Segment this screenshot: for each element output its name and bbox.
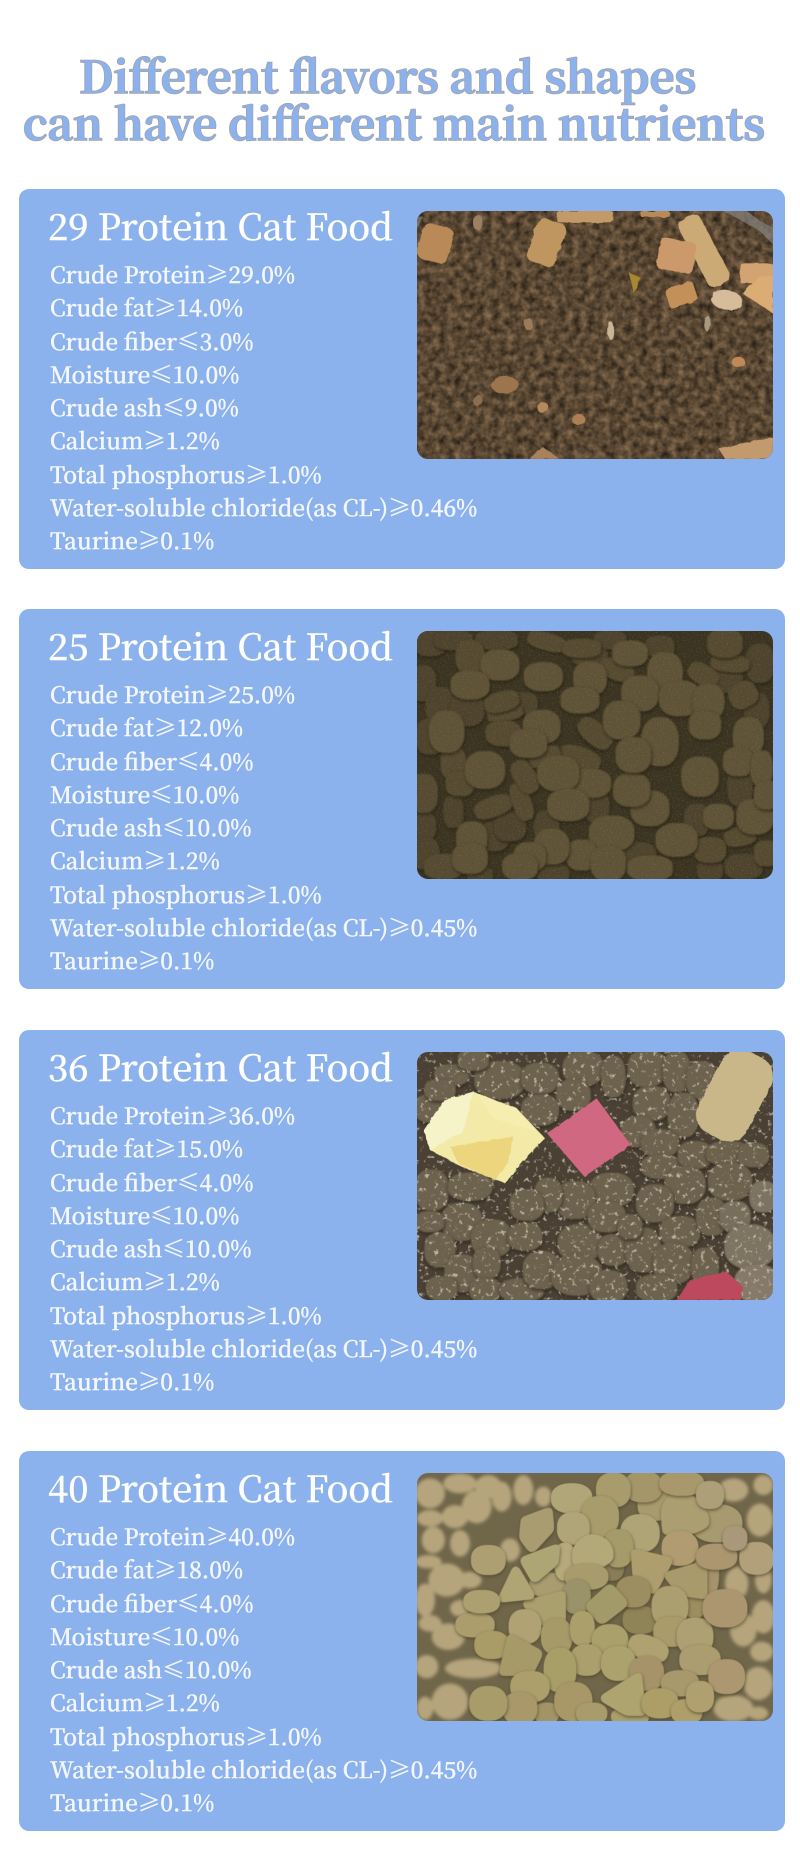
nutrient list: Crude Protein≥25.0% [50, 678, 295, 710]
nutrient list: Water-soluble chloride(as CL-)≥0.46% [50, 491, 477, 523]
panel heading: 40 Protein Cat Food [48, 1462, 393, 1513]
nutrient list: Moisture≤10.0% [50, 1620, 239, 1652]
nutrient list: Taurine≥0.1% [50, 524, 214, 556]
nutrient list: Crude fiber≤4.0% [50, 1166, 253, 1198]
nutrient list: Crude ash≤10.0% [50, 1653, 251, 1685]
nutrient list: Moisture≤10.0% [50, 1199, 239, 1231]
nutrient list [50, 678, 477, 976]
photo: triangular tan kibble [417, 1473, 773, 1721]
photo: mixed kibble with freeze-dried cubes [417, 1052, 773, 1300]
nutrient list: Crude fat≥15.0% [50, 1132, 243, 1164]
nutrient list: Moisture≤10.0% [50, 778, 239, 810]
photo: round flat brown kibble [417, 631, 773, 879]
nutrient list: Crude fat≥12.0% [50, 711, 243, 743]
nutrient list: Water-soluble chloride(as CL-)≥0.45% [50, 1332, 477, 1364]
nutrient list: Calcium≥1.2% [50, 1686, 220, 1718]
nutrient list: Crude fiber≤4.0% [50, 745, 253, 777]
title line 1: Different flavors and shapes [79, 44, 696, 106]
panel: 29 protein cat food [19, 189, 785, 569]
nutrient list: Crude fat≥18.0% [50, 1553, 243, 1585]
nutrient list: Taurine≥0.1% [50, 1365, 214, 1397]
nutrient list: Total phosphorus≥1.0% [50, 458, 322, 490]
nutrient list: Crude ash≤10.0% [50, 1232, 251, 1264]
nutrient list: Water-soluble chloride(as CL-)≥0.45% [50, 1753, 477, 1785]
panel heading: 36 Protein Cat Food [48, 1041, 393, 1092]
panel heading: 29 Protein Cat Food [48, 200, 393, 251]
nutrient list: Calcium≥1.2% [50, 1265, 220, 1297]
nutrient list: Crude fiber≤3.0% [50, 325, 253, 357]
nutrient list [50, 1520, 477, 1818]
photo: small dark kibble with treat chunks [417, 211, 773, 459]
nutrient list: Crude Protein≥29.0% [50, 258, 295, 290]
nutrient list: Crude ash≤9.0% [50, 391, 239, 423]
nutrient list: Total phosphorus≥1.0% [50, 878, 322, 910]
nutrient list: Crude Protein≥36.0% [50, 1099, 295, 1131]
nutrient list: Calcium≥1.2% [50, 844, 220, 876]
nutrient list: Taurine≥0.1% [50, 944, 214, 976]
nutrient list: Moisture≤10.0% [50, 358, 239, 390]
panel: 25 protein cat food [19, 609, 785, 989]
nutrient list: Taurine≥0.1% [50, 1786, 214, 1818]
nutrient list [50, 1099, 477, 1397]
panel: 40 protein cat food [19, 1451, 785, 1831]
title [23, 44, 765, 153]
nutrient list: Crude fat≥14.0% [50, 291, 243, 323]
nutrient list: Total phosphorus≥1.0% [50, 1720, 322, 1752]
nutrient list: Calcium≥1.2% [50, 424, 220, 456]
nutrient list [50, 258, 477, 556]
panel heading: 25 Protein Cat Food [48, 620, 393, 671]
nutrient list: Crude fiber≤4.0% [50, 1587, 253, 1619]
nutrient list: Water-soluble chloride(as CL-)≥0.45% [50, 911, 477, 943]
nutrient list: Total phosphorus≥1.0% [50, 1299, 322, 1331]
panel: 36 protein cat food [19, 1030, 785, 1410]
nutrient list: Crude Protein≥40.0% [50, 1520, 295, 1552]
title line 2: can have different main nutrients [23, 91, 765, 153]
nutrient list: Crude ash≤10.0% [50, 811, 251, 843]
